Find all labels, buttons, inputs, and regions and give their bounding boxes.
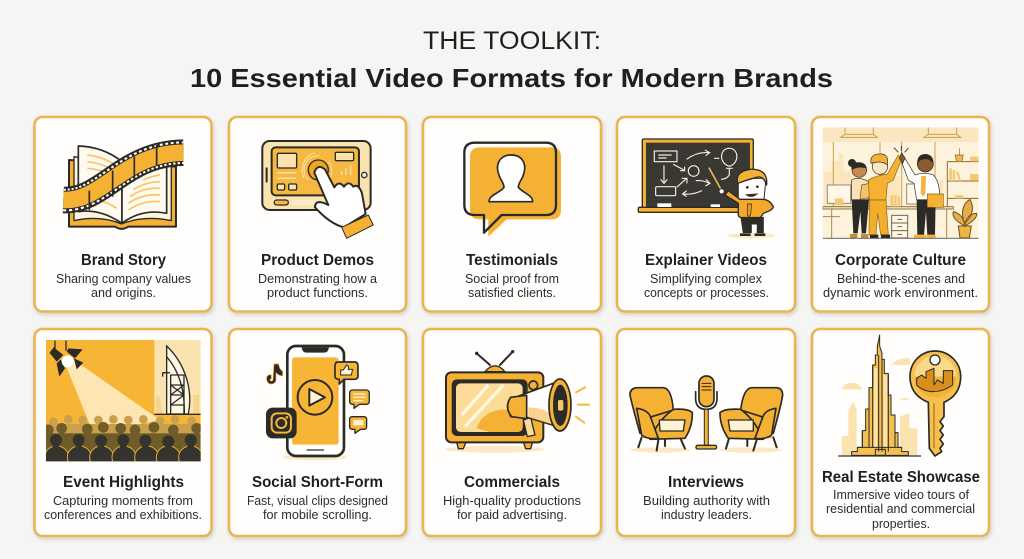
heading: Social Short-Form <box>252 474 383 491</box>
description: industry leaders. <box>661 508 752 522</box>
illustration: team high five in office <box>823 127 979 239</box>
heading: Real Estate Showcase <box>822 469 980 486</box>
panel: Corporate Culture <box>812 117 989 312</box>
description: Simplifying complex <box>650 272 763 286</box>
heading: Corporate Culture <box>835 252 966 269</box>
panel: Explainer Videos <box>617 117 795 312</box>
description: for paid advertising. <box>457 508 567 522</box>
heading: Interviews <box>668 474 744 491</box>
description: satisfied clients. <box>468 286 556 300</box>
description: High-quality productions <box>443 494 581 508</box>
description: residential and commercial <box>826 502 975 516</box>
description: Social proof from <box>465 272 559 286</box>
panel: Brand Story <box>34 117 212 312</box>
icon: teacher at chalkboard <box>638 139 775 238</box>
panel: Interviews <box>617 329 795 536</box>
title: 10 Essential Video Formats for Modern Brands <box>190 63 833 93</box>
illustration: spotlight on conference crowd <box>43 340 203 469</box>
description <box>258 272 377 300</box>
description <box>443 494 581 522</box>
heading: Explainer Videos <box>645 252 767 269</box>
description: Sharing company values <box>56 272 191 286</box>
description: Demonstrating how a <box>258 272 377 286</box>
description: conferences and exhibitions. <box>44 508 202 522</box>
panel: Product Demos <box>229 117 406 312</box>
description <box>643 494 770 522</box>
description: Fast, visual clips designed <box>247 494 388 508</box>
icon: tablet with tapping hand <box>262 141 373 238</box>
panel: Real Estate Showcase <box>812 329 989 536</box>
description: Building authority with <box>643 494 770 508</box>
icon: skyscraper and city key <box>838 335 961 456</box>
description: and origins. <box>91 286 156 300</box>
description <box>44 494 202 522</box>
description: product functions. <box>267 286 368 300</box>
description: properties. <box>872 517 930 531</box>
description: Behind-the-scenes and <box>837 272 965 286</box>
icon: speech bubble with person <box>464 143 561 237</box>
title: THE TOOLKIT: <box>423 27 601 55</box>
heading: Brand Story <box>81 252 166 269</box>
description: concepts or processes. <box>644 286 769 300</box>
heading: Product Demos <box>261 252 374 269</box>
description <box>644 272 769 300</box>
description: Capturing moments from <box>53 494 193 508</box>
panel: Social Short-Form <box>229 329 406 536</box>
panel: Testimonials <box>423 117 601 312</box>
heading: Commercials <box>464 474 560 491</box>
description <box>465 272 559 300</box>
icon: open book with film strip <box>63 145 183 229</box>
icon: retro TV with megaphone <box>445 350 589 453</box>
description <box>56 272 191 300</box>
description: for mobile scrolling. <box>263 508 372 522</box>
description: dynamic work environment. <box>823 286 978 300</box>
icon: armchairs and microphone <box>630 376 783 453</box>
title <box>190 27 833 93</box>
heading: Testimonials <box>466 252 558 269</box>
heading: Event Highlights <box>63 474 184 491</box>
description <box>823 272 978 300</box>
icon: phone with social media <box>266 346 369 460</box>
panel: Commercials <box>423 329 601 536</box>
description <box>247 494 388 522</box>
description: Immersive video tours of <box>833 488 970 502</box>
description <box>826 488 975 531</box>
panel: Event Highlights <box>34 329 212 536</box>
